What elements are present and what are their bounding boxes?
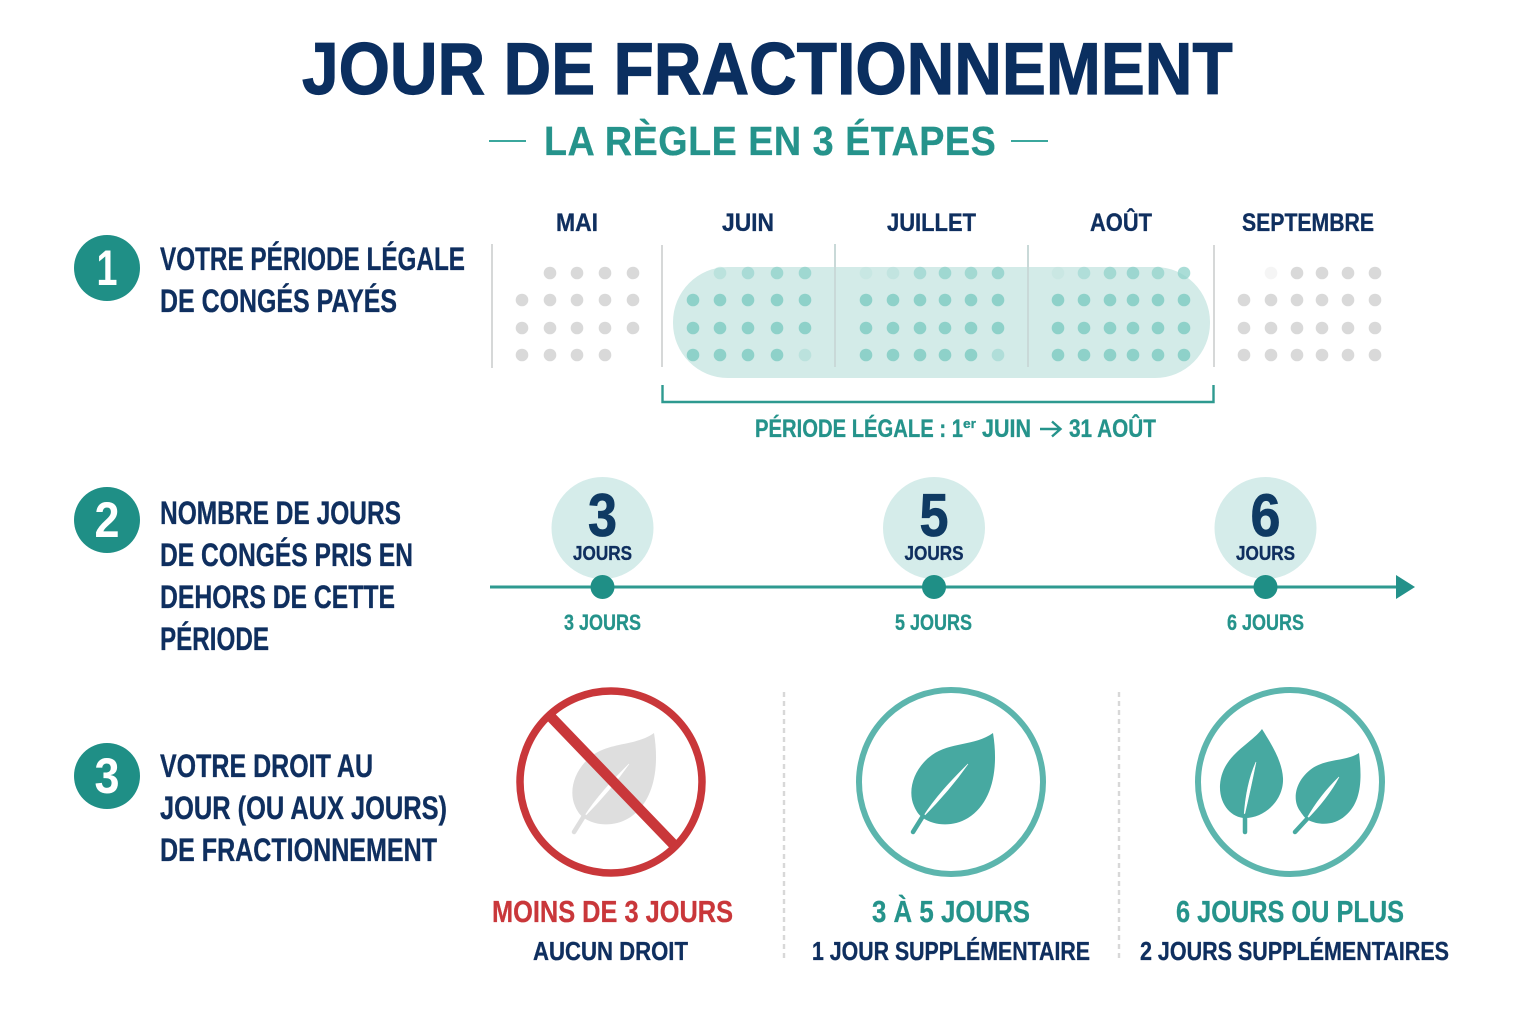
timeline marker: 3 jours: JOURS [573,543,632,565]
legal period band [673,267,1210,378]
dots: june [687,267,811,361]
step 1 heading: DE CONGÉS PAYÉS [160,283,397,319]
timeline marker: 5 jours [883,477,985,635]
step 3 badge: 3 [94,748,120,804]
dots: may [516,267,639,361]
month separators [492,244,1214,368]
step 2 heading: NOMBRE DE JOURS [160,495,401,531]
timeline marker: 6 jours: 6 [1250,482,1280,549]
month labels: SEPTEMBRE [1242,209,1374,237]
outcome: one extra day: 3 À 5 JOURS [872,894,1030,929]
outcome: two extra days [1140,894,1449,966]
timeline marker: 3 jours: 3 [588,482,617,549]
outcome: no right [492,894,733,966]
subtitle: LA RÈGLE EN 3 ÉTAPES [544,119,996,164]
step 1 heading: VOTRE PÉRIODE LÉGALE [160,241,465,277]
month labels: AOÛT [1090,207,1152,237]
step 3 heading: DE FRACTIONNEMENT [160,832,437,868]
step 2 heading: DE CONGÉS PRIS EN [160,537,413,573]
icon: one leaf [859,690,1043,874]
step 2 badge [74,487,140,553]
month labels: JUILLET [887,209,976,237]
step 1 badge: 1 [96,240,118,296]
step 3 heading: VOTRE DROIT AU [160,748,373,784]
legal period label: JUIN [982,415,1031,443]
legal period label: er [963,416,976,431]
step 2 heading: PÉRIODE [160,621,269,657]
icon: no right, crossed-out grey leaf [520,691,702,873]
month labels: MAI [556,209,598,237]
legal period label: PÉRIODE LÉGALE : 1 [755,414,963,443]
timeline marker: 3 jours: 3 JOURS [564,610,641,635]
outcome: no right: AUCUN DROIT [533,936,688,966]
outcome: two extra days: 2 JOURS SUPPLÉMENTAIRES [1140,936,1449,966]
outcome: one extra day: 1 JOUR SUPPLÉMENTAIRE [812,936,1090,966]
timeline marker: 6 jours [1214,477,1316,635]
dashed divider right [1118,692,1120,962]
outcome: two extra days: 6 JOURS OU PLUS [1176,894,1404,929]
timeline marker: 5 jours: 5 [920,482,948,549]
title: JOUR DE FRACTIONNEMENT [302,28,1233,110]
step 3 heading: JOUR (OU AUX JOURS) [160,790,447,826]
step 1 heading [160,241,465,319]
timeline arrow [490,575,1415,599]
legal period label: 31 AOÛT [1069,413,1156,443]
legal period label [755,413,1156,443]
timeline marker: 3 jours [552,477,654,635]
timeline marker: 5 jours: 5 JOURS [895,610,972,635]
timeline marker: 6 jours: JOURS [1236,543,1295,565]
outcome: one extra day [812,894,1090,966]
outcome: no right: MOINS DE 3 JOURS [492,894,733,929]
icon: two leaves [1198,690,1382,874]
step 2 badge: 2 [94,492,120,548]
step 2 heading: DEHORS DE CETTE [160,579,395,615]
timeline marker: 6 jours: 6 JOURS [1227,610,1304,635]
month labels: JUIN [722,209,774,237]
dashed divider left [783,692,785,962]
step 3 heading [160,748,447,868]
bracket [662,385,1214,402]
step 2 heading [160,495,413,657]
dots: july [860,267,1004,361]
step 3 badge [74,743,140,809]
dots: september [1238,267,1381,361]
timeline marker: 5 jours: JOURS [904,543,964,565]
step 1 badge [74,235,140,301]
dots: august [1052,267,1190,361]
month labels [556,207,1374,237]
